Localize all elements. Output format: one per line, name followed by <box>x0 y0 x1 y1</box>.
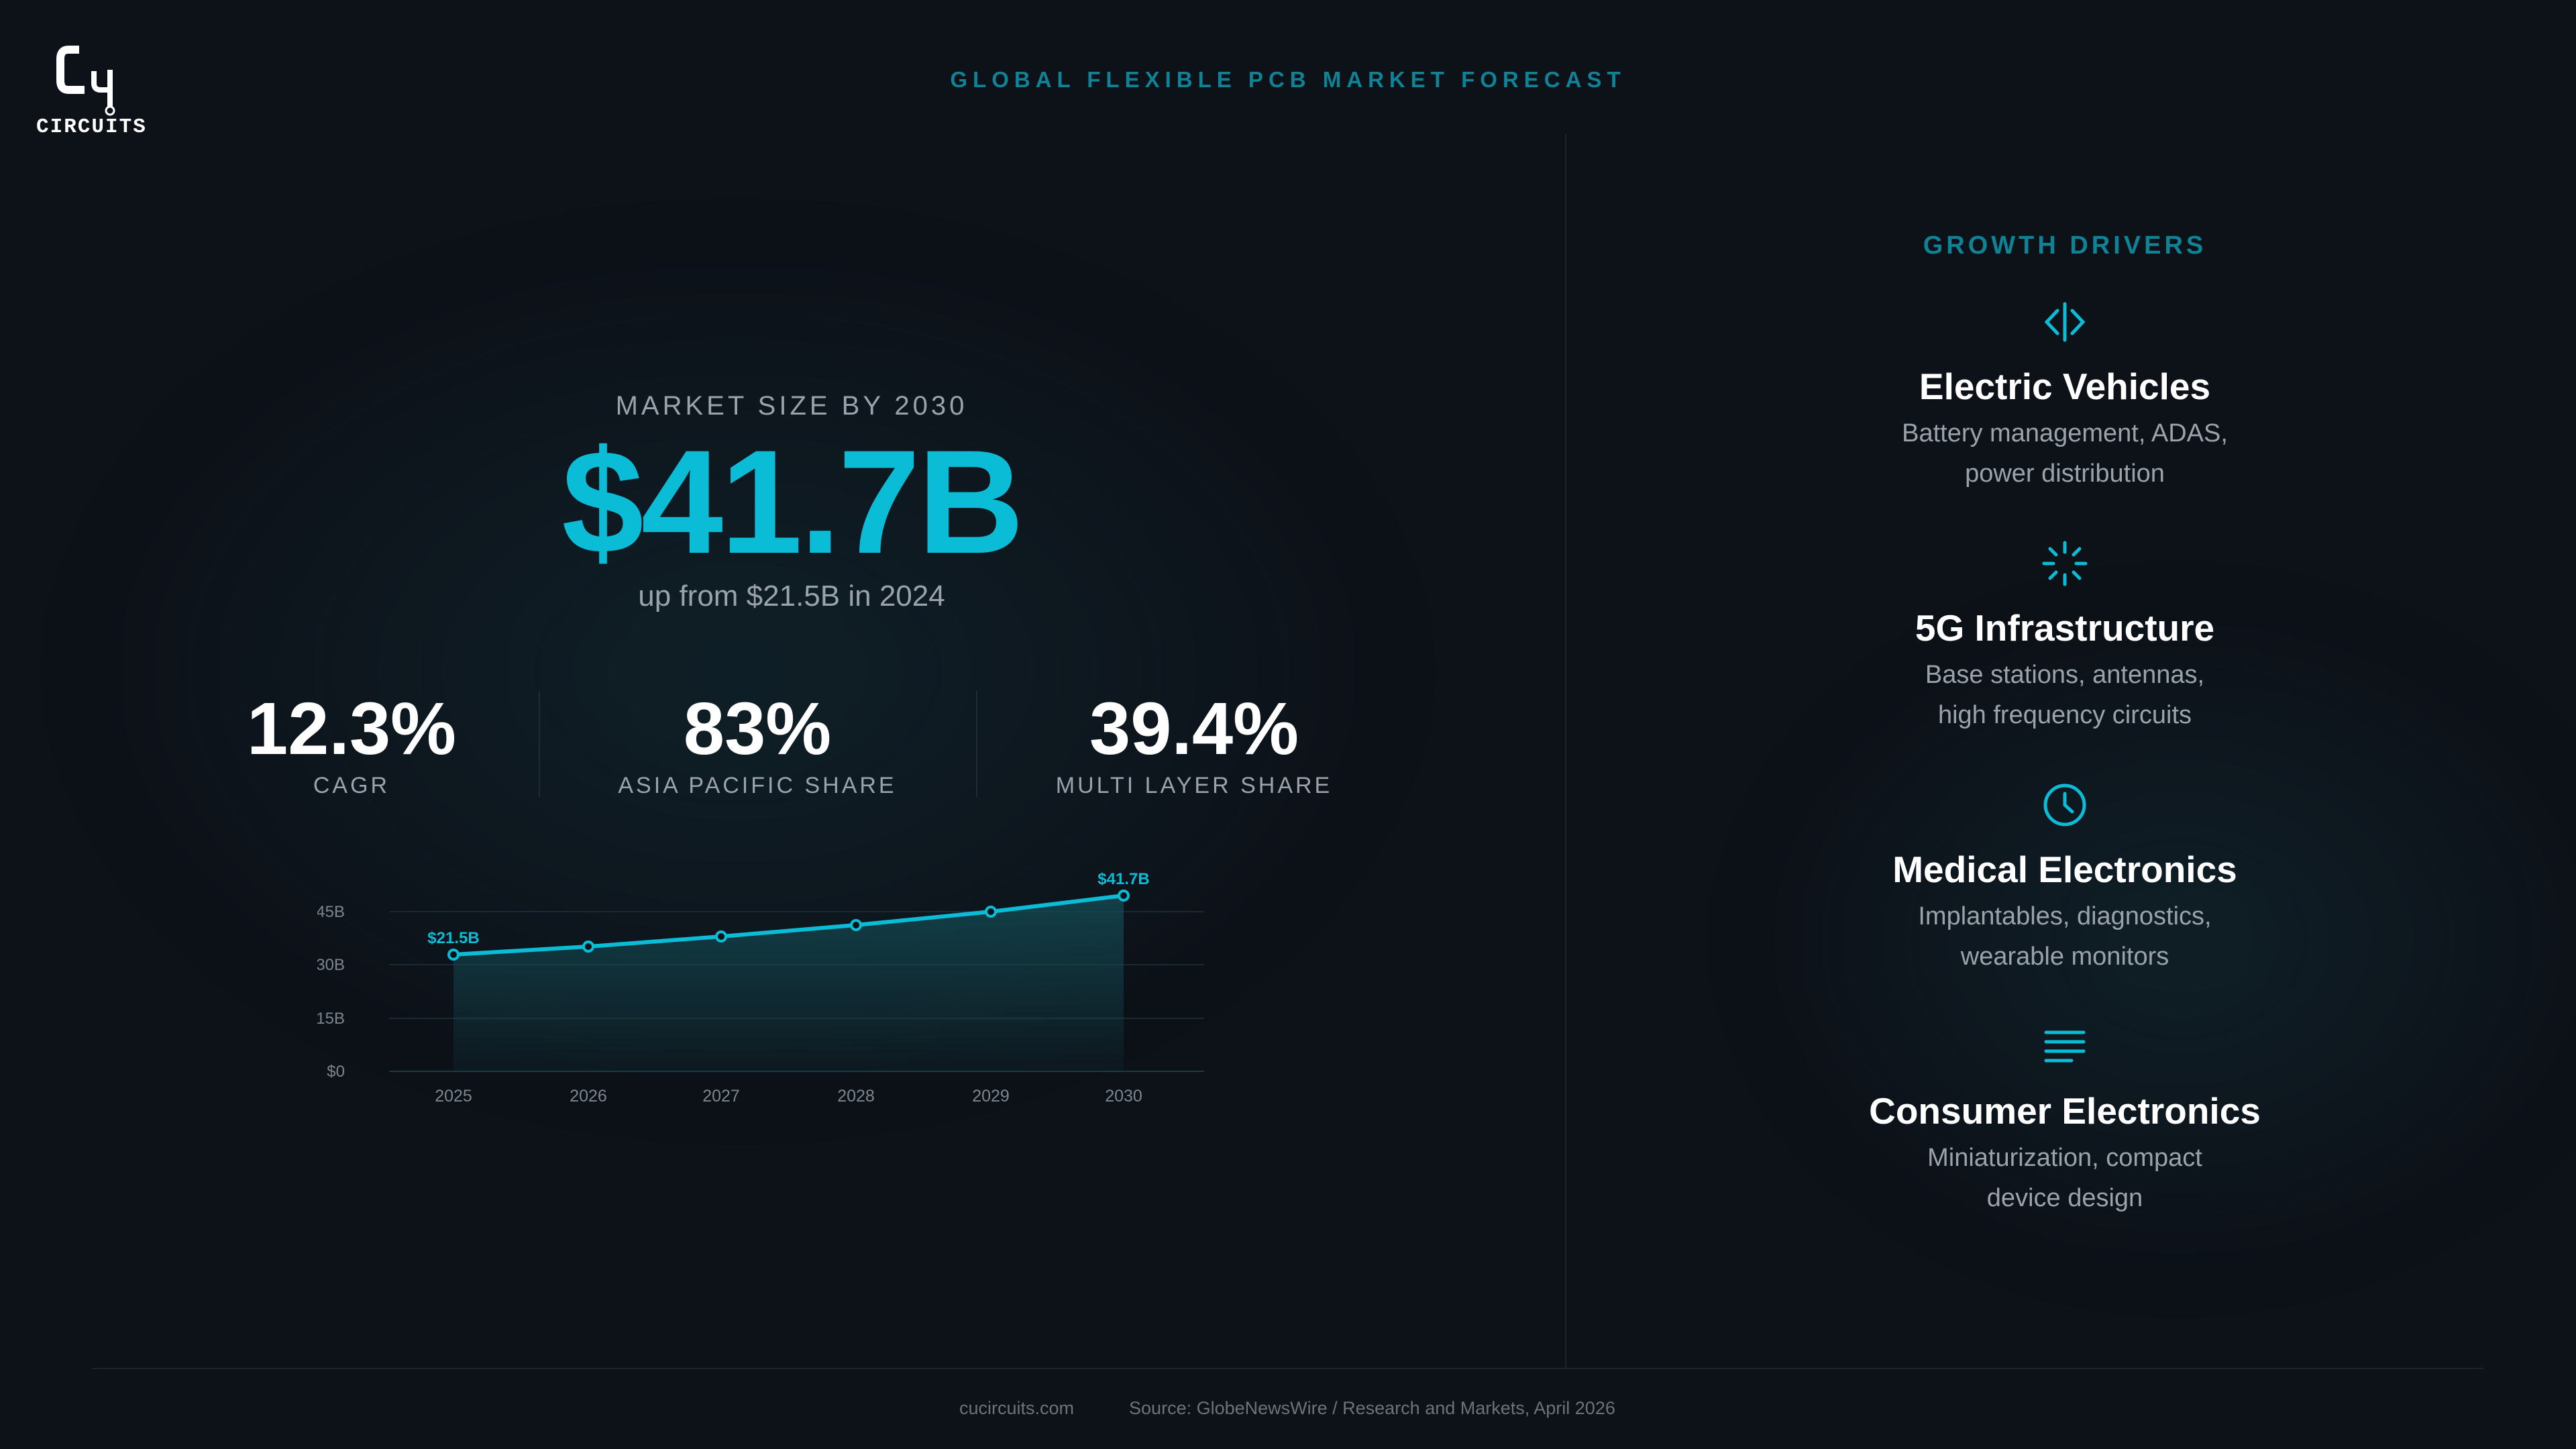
driver: 5G: Base stations, antennas, <box>1925 661 2204 689</box>
stat: Multi layer: MULTI LAYER SHARE <box>1056 773 1332 798</box>
driver: consumer: Consumer Electronics <box>1869 1090 2261 1132</box>
driver: consumer: Miniaturization, compact <box>1927 1144 2202 1172</box>
stat: Asia Pacific: ASIA PACIFIC SHARE <box>618 773 897 798</box>
footer: cucircuits.com Source: GlobeNewsWire / Research and Markets, April 2026 <box>959 1398 1615 1418</box>
driver: 5G <box>1915 541 2214 729</box>
title: GLOBAL FLEXIBLE PCB MARKET FORECAST <box>950 67 1626 92</box>
line chart: 2025 <box>435 1087 472 1106</box>
driver: 5G: high frequency circuits <box>1938 701 2192 729</box>
stat: Asia Pacific: 83% <box>684 688 831 770</box>
line chart: 2026 <box>570 1087 607 1106</box>
driver: 5G: 5G Infrastructure <box>1915 607 2214 649</box>
driver: medical: wearable monitors <box>1961 943 2169 971</box>
driver: consumer <box>1869 1030 2261 1212</box>
stats <box>247 688 1332 798</box>
driver: consumer: device design <box>1987 1184 2143 1212</box>
driver: medical <box>1892 784 2237 971</box>
driver: medical: Implantables, diagnostics, <box>1918 902 2212 930</box>
panel: growth drivers <box>1869 231 2261 1212</box>
line chart <box>317 870 1204 1106</box>
market size headline: $41.7B <box>561 419 1022 584</box>
line chart: 2030 <box>1105 1087 1142 1106</box>
line chart: $41.7B <box>1097 870 1150 888</box>
driver: medical: Medical Electronics <box>1892 849 2237 890</box>
driver: EV: Electric Vehicles <box>1919 366 2210 407</box>
market size headline: MARKET SIZE BY 2030 <box>616 391 967 421</box>
driver: EV: Battery management, ADAS, <box>1902 419 2228 447</box>
line chart: 2029 <box>972 1087 1010 1106</box>
panel: growth drivers: GROWTH DRIVERS <box>1923 231 2206 260</box>
line chart: 2028 <box>837 1087 875 1106</box>
stat: CAGR: CAGR <box>313 773 390 798</box>
stat: Multi layer <box>1056 688 1332 798</box>
driver: EV <box>1902 302 2228 488</box>
market size headline: up from $21.5B in 2024 <box>638 580 945 612</box>
stat: CAGR: 12.3% <box>247 688 456 770</box>
stat: Multi layer: 39.4% <box>1089 688 1299 770</box>
stat: Asia Pacific <box>618 688 897 798</box>
logo: CIRCUITS <box>36 115 147 139</box>
line chart: $21.5B <box>427 929 480 947</box>
line chart: $0 <box>327 1063 345 1081</box>
logo <box>36 46 147 139</box>
line chart: 2027 <box>702 1087 740 1106</box>
driver: EV: power distribution <box>1965 460 2165 488</box>
